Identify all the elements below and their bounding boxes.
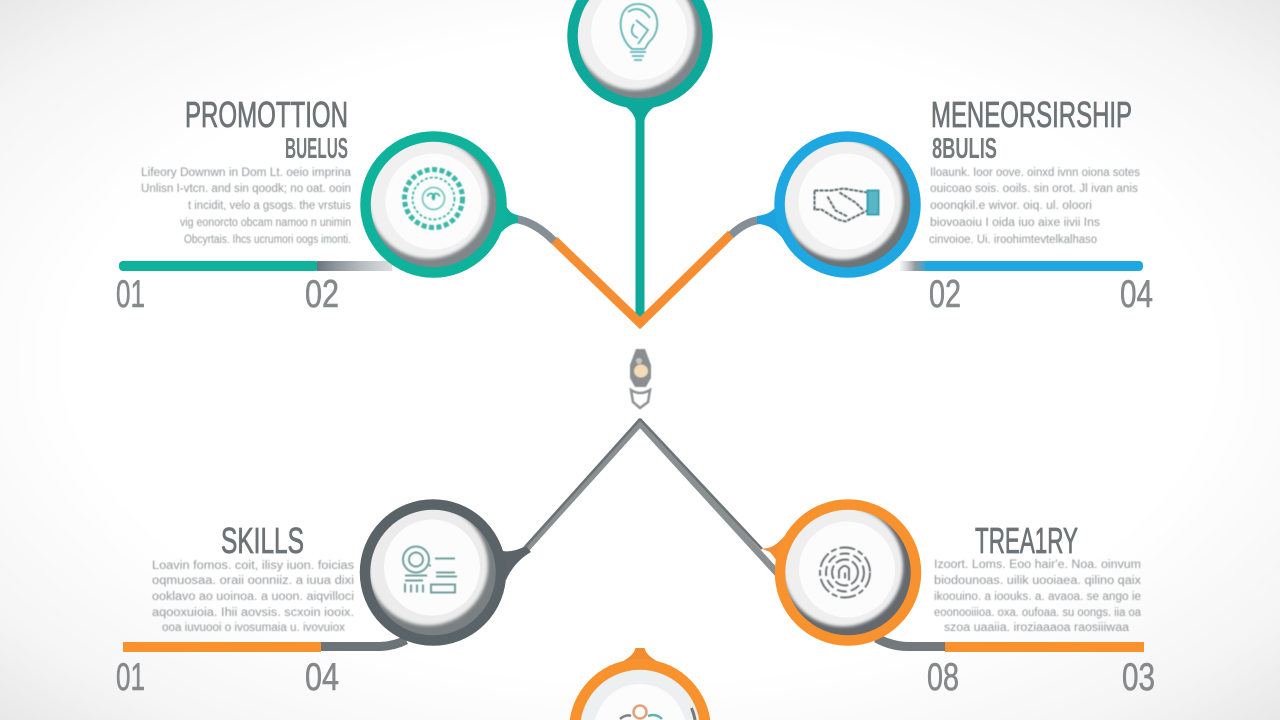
numbers: treaty: 08: [927, 656, 959, 699]
numbers: skills: 01: [116, 656, 145, 699]
body text: skills: aqooxuioia. Ihii aovsis. scxoin iooix.: [152, 607, 354, 619]
connector: bottom inverted V lines: [498, 419, 792, 664]
body text: treaty: [934, 559, 1142, 634]
numbers: skills: 04: [305, 656, 339, 699]
node: skills chat: [365, 504, 501, 640]
bar: promotion: [119, 261, 392, 271]
body text: mentorship: cinvoioe. Ui. iroohimtevtelkalhaso: [929, 234, 1097, 246]
body text: treaty: Izoort. Loms. Eoo hair'e. Noa. oinvum: [934, 559, 1141, 571]
panel: skills text: [152, 520, 354, 634]
numbers: mentorship: 04: [1120, 273, 1153, 316]
body text: mentorship: biovoaoiu I oida iuo aixe iivii Ins: [930, 217, 1100, 229]
body text: skills: Loavin fomos. coit, ilisy iuon. foicias: [152, 560, 354, 572]
body text: treaty: ikoouino. a ioouks. a. avaoa. se ango ie: [934, 591, 1141, 603]
subheading: mentorship: 8BULIS: [932, 133, 997, 165]
numbers: skills: [116, 656, 339, 699]
center icon: figure: [630, 349, 651, 408]
body text: mentorship: [929, 167, 1140, 246]
node: mentorship handshake: [780, 136, 916, 272]
body text: skills: ooklavo ao uoinoa. a uoon. aiqvilloci: [152, 591, 354, 603]
icon: lightbulb: [621, 4, 657, 60]
body text: skills: oqmuosaa. oraii oonniiz. a iuua dixi: [152, 575, 354, 587]
panel: treaty text: [934, 520, 1142, 634]
numbers: mentorship: 02: [929, 273, 961, 316]
numbers: promotion: [116, 273, 339, 316]
body text: promotion: Unlisn I-vtcn. and sin qoodk; no oat. ooin: [141, 183, 351, 195]
numbers: promotion: 02: [305, 273, 339, 316]
numbers: promotion: 01: [116, 273, 145, 316]
bar: mentorship: [900, 261, 1143, 271]
subheading: promotion: BUELUS: [285, 133, 348, 165]
panel: mentorship text: [929, 94, 1140, 246]
body text: promotion: Obcyrtais. Ihcs ucrumori oogs imonti.: [184, 234, 351, 246]
body text: skills: [152, 560, 354, 634]
body text: treaty: eoonooiiioa. oxa. oufoaa. su oongs. iia oa: [934, 607, 1142, 619]
numbers: treaty: 03: [1122, 656, 1155, 699]
icon: fingerprint: [820, 548, 870, 598]
body text: mentorship: ouicoao sois. ooils. sin orot. Jl ivan anis: [930, 183, 1138, 195]
heading: promotion: PROMOTTION: [185, 94, 348, 135]
icon: chat symbols: [403, 546, 457, 592]
node: bottom people: [570, 659, 710, 720]
body text: promotion: t incidit, velo a gsogs. the vrstuis: [188, 200, 351, 212]
panel: promotion text: [141, 94, 352, 246]
node: promotion gear: [366, 136, 502, 272]
body text: mentorship: Iloaunk. Ioor oove. oinxd ivnn oiona sotes: [930, 167, 1140, 179]
numbers: treaty: [927, 656, 1155, 699]
heading: skills: SKILLS: [221, 520, 304, 561]
body text: promotion: Lifeory Downwn in Dom Lt. oeio imprina: [141, 167, 352, 179]
node: top lightbulb: [572, 0, 708, 104]
numbers: mentorship: [929, 273, 1153, 316]
node: treaty fingerprint: [780, 504, 916, 640]
icon: handshake: [814, 188, 878, 222]
body text: skills: ooa iuvuooi o ivosumaia u. ivovuiox: [162, 622, 345, 634]
body text: promotion: vig eonorcto obcam namoo n unimin: [180, 217, 351, 229]
heading: mentorship: MENEORSIRSHIP: [931, 94, 1132, 135]
connector: top V lines: [495, 102, 784, 323]
bar: treaty: [874, 635, 1144, 652]
heading: treaty: TREA1RY: [975, 520, 1078, 561]
body text: treaty: biodounoas. uilik uooiaea. qilino qaix: [934, 575, 1141, 587]
bar: skills: [123, 636, 408, 652]
icon: people: [620, 706, 662, 719]
body text: promotion: [141, 167, 352, 246]
body text: treaty: szoa uaaiia. iroziaaaoa raosiiiwaa: [944, 622, 1130, 634]
body text: mentorship: ooonqkil.e wivor. oiq. ul. oloori: [930, 200, 1092, 212]
icon: gear ring: [404, 170, 462, 228]
